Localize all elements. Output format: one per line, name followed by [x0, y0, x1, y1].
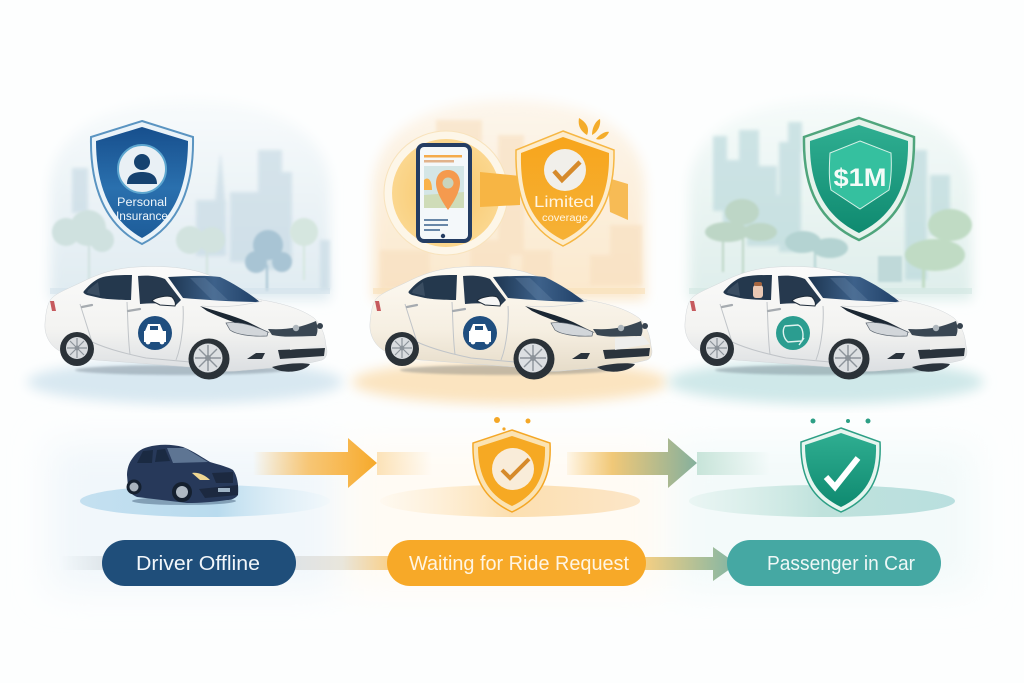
ground shadow: [668, 360, 984, 404]
ground shadow: [352, 360, 668, 404]
ground ellipse: [689, 485, 955, 517]
panel background: [689, 100, 972, 300]
shield label: $1M: [834, 164, 886, 192]
shield: personal insurance: [91, 121, 193, 244]
pill: Waiting for Ride Request: Waiting for Ride Request: [409, 553, 629, 575]
panel: limited coverage scene: [352, 100, 668, 404]
shield label: Insurance: [116, 211, 168, 223]
arrow: to waiting: [253, 438, 432, 488]
city skyline: [713, 122, 950, 280]
car: [685, 267, 967, 380]
ground ellipse: [380, 485, 640, 517]
shore band: [50, 288, 330, 294]
icon: check badge: [544, 149, 586, 191]
ground ellipse: [80, 485, 330, 517]
stage 2: waiting shield: [380, 417, 770, 517]
icon: dark hatchback car: [126, 445, 238, 505]
shield label: Personal: [117, 197, 167, 209]
stage 3: passenger shield: [689, 418, 955, 517]
shield: limited coverage: [516, 131, 614, 246]
shield label: coverage: [542, 213, 588, 224]
icon: orange shield: [473, 417, 550, 512]
trees: [705, 199, 972, 288]
connector: into Driver Offline: [60, 556, 105, 570]
car: [370, 267, 652, 380]
connector arrow: waiting to passenger: [644, 547, 737, 581]
shore band: [689, 288, 972, 294]
icon: phone with map pin: [416, 143, 472, 243]
arrow: to passenger: [567, 438, 770, 488]
door logo: [463, 316, 497, 350]
panel background: [50, 100, 330, 300]
door logo: [776, 316, 810, 350]
city skyline: [72, 150, 330, 290]
pill: Waiting for Ride Request: [387, 540, 646, 586]
icon: person: [118, 145, 166, 193]
pill: Passenger in Car: [727, 540, 941, 586]
trees: [52, 210, 318, 291]
shield label: [116, 197, 168, 223]
icon: teal shield: [801, 418, 880, 512]
panel: $1M coverage scene: [668, 100, 984, 404]
shield label: Limited: [534, 194, 594, 211]
city skyline: [380, 120, 642, 290]
passenger: [753, 282, 763, 298]
ground shadow: [27, 360, 343, 404]
car: [45, 267, 327, 380]
panel background: [373, 100, 645, 300]
background wash: [50, 445, 975, 590]
ribbon connector: [480, 172, 520, 207]
icon: leaves: [579, 118, 609, 140]
pill: Driver Offline: Driver Offline: [136, 553, 260, 575]
connector: offline to waiting: [294, 556, 390, 570]
shield: $1M: [804, 118, 914, 240]
pill: Passenger in Car: Passenger in Car: [767, 553, 915, 575]
shield label: [534, 194, 594, 224]
pill: Driver Offline: [102, 540, 296, 586]
circle behind phone: [384, 131, 508, 255]
shore band: [373, 288, 645, 294]
right ribbon: [608, 178, 628, 220]
stage 1: offline car: [80, 438, 432, 517]
door logo: [138, 316, 172, 350]
panel: personal insurance scene: [27, 100, 343, 404]
